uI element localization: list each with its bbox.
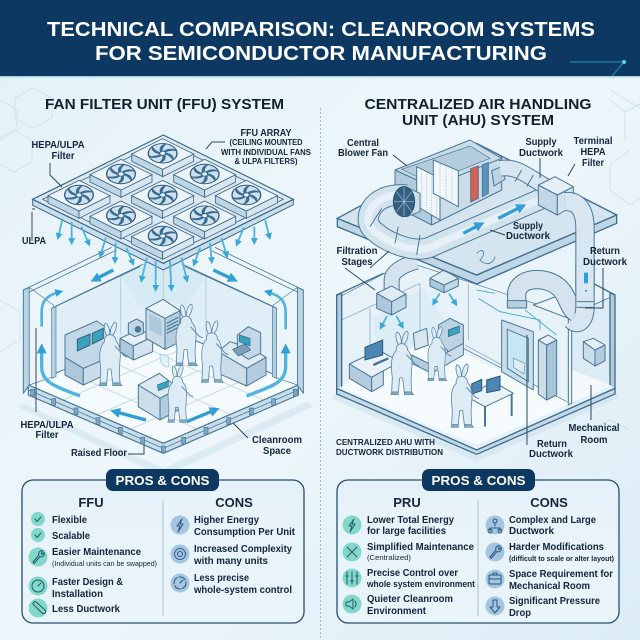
con: pressure drop [486, 595, 600, 619]
pros heading: PRU [393, 495, 421, 510]
header banner [0, 0, 640, 78]
floor [340, 338, 570, 445]
AHU upper platform [337, 140, 617, 290]
FFU labels: ULPA [22, 236, 46, 247]
AHU labels: Ductwork [519, 148, 563, 159]
con: space requirement: Mechanical Room [509, 580, 590, 592]
cabinet [538, 335, 557, 400]
mechanical room [533, 295, 612, 405]
AHU workers [391, 326, 479, 427]
background hexagon pattern [0, 88, 640, 430]
con: higher energy [170, 514, 295, 538]
airlock door [502, 320, 533, 390]
heading: AHU system: UNIT (AHU) SYSTEM [402, 112, 554, 129]
AHU labels: Supply [513, 221, 543, 232]
con: harder modifications: Harder Modifications [509, 541, 604, 553]
heading: AHU system: CENTRALIZED AIR HANDLING [364, 96, 592, 113]
AHU labels: Return [590, 246, 620, 257]
pro: flexible [31, 512, 87, 526]
title: TECHNICAL COMPARISON: CLEANROOM SYSTEMS [47, 19, 595, 41]
pro: scalable: Scalable [52, 530, 90, 542]
blower fan [393, 187, 420, 217]
badge: pros and cons [106, 469, 219, 491]
FFU labels: FFU ARRAY [240, 128, 292, 139]
raised floor [28, 385, 298, 453]
AHU labels: Filter [582, 158, 604, 169]
FFU labels: HEPA/ULPA [20, 420, 74, 431]
badge: pros and cons: PROS & CONS [432, 473, 526, 488]
AHU labels: Return [537, 439, 567, 450]
desk with computer [349, 340, 400, 392]
panel: AHU pros and cons [337, 469, 619, 623]
AHU labels: Ductwork [529, 449, 573, 460]
pro: easier maintenance: (Individual units can be swapped) [52, 559, 157, 568]
tool in cleanroom [412, 318, 463, 373]
header banner: FOR SEMICONDUCTOR MANUFACTURING [95, 43, 547, 65]
callout lines [32, 142, 603, 454]
AHU labels: Supply [526, 137, 557, 148]
AHU labels: Stages [342, 257, 373, 268]
cons heading: CONS [530, 495, 568, 510]
AHU labels: Ductwork [583, 257, 627, 268]
con: higher energy: Consumption Per Unit [194, 526, 295, 538]
pro: quieter cleanroom [342, 593, 453, 617]
con: harder modifications: (difficult to scale or alter layout) [509, 554, 614, 563]
AHU labels: Central [347, 138, 379, 149]
pros heading: FFU [78, 495, 104, 510]
FFU labels: (CEILING MOUNTED [230, 138, 303, 147]
con: ductwork: Ductwork [509, 525, 554, 537]
con: higher energy: Higher Energy [194, 514, 259, 526]
AHU labels: CENTRALIZED AHU WITH [336, 437, 435, 447]
terminal HEPA box [538, 177, 573, 215]
tool: rear small unit [120, 319, 153, 360]
FFU labels: Cleanroom [252, 435, 302, 446]
FFU labels: Filter [36, 430, 59, 441]
pro: precise control: Precise Control over [367, 567, 458, 579]
con: ductwork [486, 514, 596, 537]
FFU ceiling array [33, 135, 293, 288]
workstation desk [467, 376, 513, 427]
con: complexity [170, 543, 292, 567]
pro: quieter cleanroom: Environment [367, 605, 426, 617]
AHU labels: Blower Fan [338, 148, 388, 159]
return duct drop [572, 263, 594, 323]
pro: less ductwork: Less Ductwork [52, 603, 120, 615]
FFU labels: Space [263, 446, 291, 457]
badge: pros and cons: PROS & CONS [116, 473, 210, 488]
con: space requirement: Space Requirement for [509, 568, 613, 580]
con: pressure drop: Significant Pressure [509, 595, 600, 607]
con: pressure drop: Drop [509, 607, 531, 619]
AHU labels: Mechanical [568, 423, 620, 434]
tool: rear cabinet [146, 299, 180, 349]
airflow arrows in room [42, 270, 286, 422]
panel: FFU pros and cons [22, 469, 304, 623]
pro: easier maintenance [28, 546, 157, 568]
con: complexity: Increased Complexity [194, 543, 292, 555]
pro: faster design: Installation [52, 588, 103, 600]
pro: flexible: Flexible [52, 514, 87, 526]
pro: easier maintenance: Easier Maintenance [52, 546, 141, 558]
pro: precise control [342, 567, 475, 589]
tool: left console [65, 321, 110, 385]
FFU labels [20, 128, 312, 459]
supply drops and diffusers [377, 262, 458, 327]
AHU labels [336, 136, 627, 460]
tool: right console [218, 327, 266, 386]
pro: simplified maintenance [342, 541, 474, 562]
side walls [23, 247, 303, 393]
FFU labels: WITH INDIVIDUAL FANS [221, 148, 312, 157]
AHU labels: Terminal [574, 136, 613, 147]
pro: simplified maintenance: Simplified Maintenance [367, 541, 474, 553]
thin return paths [477, 290, 557, 335]
air handling unit [395, 140, 505, 225]
AHU labels: HEPA [580, 147, 606, 158]
floor [28, 327, 298, 443]
con: less precise: whole-system control [193, 584, 292, 596]
con: complexity: with many units [193, 555, 268, 567]
tool: front wafer machine [138, 355, 178, 420]
con: less precise [170, 572, 292, 596]
con: ductwork: Complex and Large [509, 514, 596, 526]
pro: faster design [28, 576, 123, 600]
supply duct [368, 168, 550, 255]
heading: FFU system: FAN FILTER UNIT (FFU) SYSTEM [45, 96, 284, 113]
AHU labels: Ductwork [506, 231, 550, 242]
pro: lower energy: for large facilities [367, 525, 446, 537]
pro: lower energy: Lower Total Energy [367, 514, 454, 526]
pro: quieter cleanroom: Quieter Cleanroom [367, 593, 453, 605]
control panel box [583, 338, 605, 366]
AHU room illustration [332, 262, 620, 462]
FFU labels: Raised Floor [71, 448, 127, 459]
pro: simplified maintenance: (Centralized) [367, 553, 412, 562]
pro: scalable [31, 528, 90, 542]
back walls [52, 253, 277, 385]
pro: less ductwork [28, 598, 120, 618]
heading: AHU system [364, 96, 592, 129]
rear walls [340, 262, 570, 403]
return duct riser [565, 202, 586, 290]
pro: lower energy [342, 514, 454, 537]
FFU labels: HEPA/ULPA [32, 140, 84, 151]
room outer walls [337, 273, 615, 454]
con: harder modifications [486, 541, 614, 563]
pro: precise control: whole system environment [366, 579, 475, 589]
AHU labels: DUCTWORK DISTRIBUTION [336, 447, 443, 457]
pro: faster design: Faster Design & [52, 576, 123, 588]
AHU labels: Filtration [336, 246, 378, 257]
AHU labels: Room [580, 435, 608, 446]
FFU labels: & ULPA FILTERS) [234, 157, 298, 166]
vertical divider [320, 108, 322, 640]
badge: pros and cons [422, 469, 535, 491]
con: less precise: Less precise [194, 572, 249, 584]
con: space requirement [486, 568, 613, 592]
FFU labels: Filter [52, 151, 75, 162]
FFU units [48, 139, 277, 259]
downward airflow arrows [58, 219, 269, 288]
cleanroom workers [99, 304, 228, 422]
cons heading: CONS [215, 495, 253, 510]
FFU cleanroom illustration [17, 247, 313, 477]
return duct arch [507, 280, 577, 313]
